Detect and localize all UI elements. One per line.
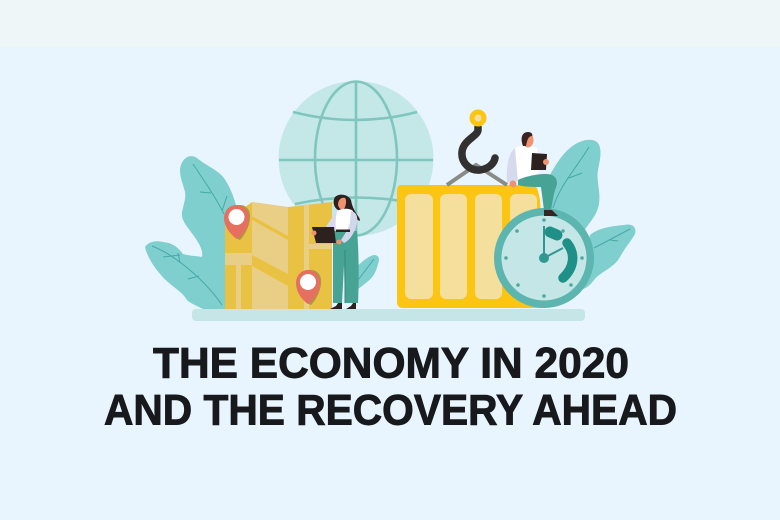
icon: clock bbox=[494, 208, 594, 308]
figure: man with clipboard bbox=[507, 132, 558, 216]
figure: woman with tablet bbox=[312, 195, 360, 309]
title: THE ECONOMY IN 2020 bbox=[153, 340, 629, 388]
ground strip bbox=[192, 309, 585, 321]
icon: map pin upper bbox=[224, 205, 250, 240]
icon: cargo container bbox=[397, 185, 545, 308]
title: AND THE RECOVERY AHEAD bbox=[104, 386, 677, 434]
icon: right leaves bbox=[548, 140, 635, 290]
icon: left leaves bbox=[145, 156, 240, 309]
icon: crane hook bbox=[447, 110, 507, 185]
icon: folded map bbox=[225, 202, 332, 309]
icon: globe bbox=[278, 81, 434, 236]
icon: right small leaf behind woman bbox=[352, 255, 379, 292]
icon: map pin lower bbox=[296, 270, 321, 305]
title bbox=[104, 340, 677, 434]
